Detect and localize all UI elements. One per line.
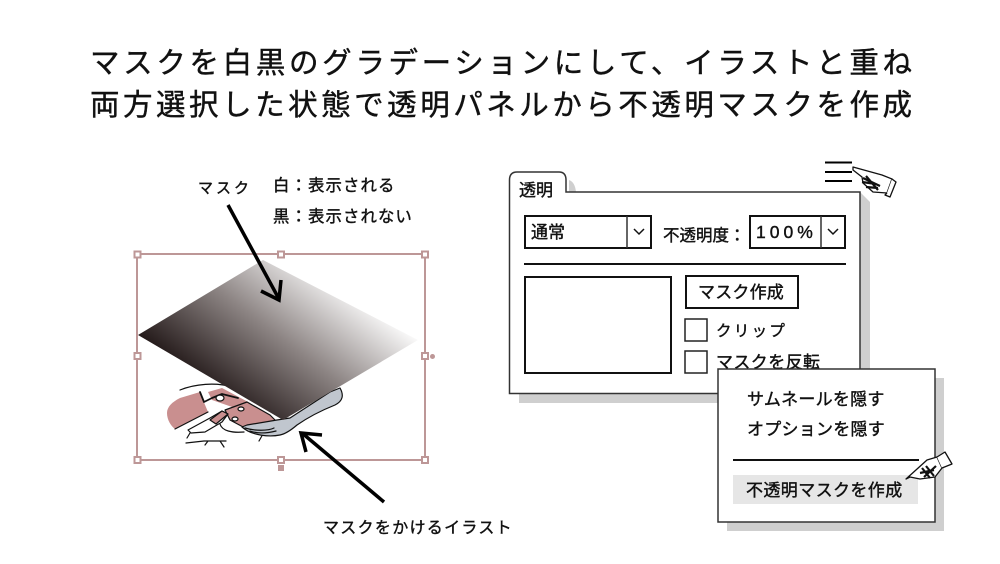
title bbox=[90, 47, 912, 122]
opacity label: 不透明度： bbox=[663, 226, 746, 245]
opacity dropdown bbox=[750, 216, 845, 248]
invert checkbox bbox=[685, 351, 707, 373]
menu shadow bbox=[727, 378, 944, 531]
blend mode dropdown bbox=[525, 216, 651, 248]
panel: transparency: 通常 bbox=[531, 223, 565, 242]
panel: transparency: マスクを反転 bbox=[716, 353, 820, 372]
label: mask: マスク bbox=[198, 180, 252, 197]
tab label: 透明 bbox=[519, 181, 553, 200]
gradient mask diamond bbox=[138, 260, 418, 420]
panel: transparency bbox=[510, 172, 870, 403]
divider bbox=[524, 263, 846, 265]
menu items: サムネールを隠す bbox=[747, 390, 885, 409]
icon: pointing hand top bbox=[853, 167, 896, 197]
highlighted item bbox=[733, 475, 918, 504]
clip checkbox bbox=[685, 319, 707, 341]
panel: context menu bbox=[718, 369, 944, 531]
label: white and black meaning bbox=[273, 177, 413, 226]
panel: context menu: 不透明マスクを作成 bbox=[746, 481, 903, 500]
arrow: to illustration bbox=[301, 433, 384, 502]
selection bounding box bbox=[134, 252, 435, 471]
icon: hamburger menu bbox=[825, 162, 852, 181]
panel: transparency: マスク作成 bbox=[698, 283, 784, 302]
icon: pointing hand bottom bbox=[906, 452, 952, 479]
panel body bbox=[510, 172, 860, 394]
label: white and black meaning: 白：表示される bbox=[273, 177, 395, 195]
illustration under mask bbox=[167, 384, 342, 447]
menu body bbox=[718, 369, 935, 522]
menu divider bbox=[733, 459, 919, 461]
title: マスクを白黒のグラデーションにして、イラストと重ね bbox=[90, 47, 912, 80]
title: 両方選択した状態で透明パネルから不透明マスクを作成 bbox=[90, 89, 912, 122]
panel: transparency: 100% bbox=[756, 222, 817, 242]
panel: transparency: クリップ bbox=[716, 322, 787, 340]
thumbnail box bbox=[525, 277, 671, 373]
menu items bbox=[747, 390, 885, 439]
mask create button bbox=[686, 276, 798, 308]
arrow: to mask bbox=[228, 205, 281, 300]
label: illustration: マスクをかけるイラスト bbox=[323, 519, 513, 537]
panel shadow bbox=[519, 180, 870, 403]
menu items: オプションを隠す bbox=[747, 420, 885, 439]
label: white and black meaning: 黒：表示されない bbox=[273, 208, 413, 226]
